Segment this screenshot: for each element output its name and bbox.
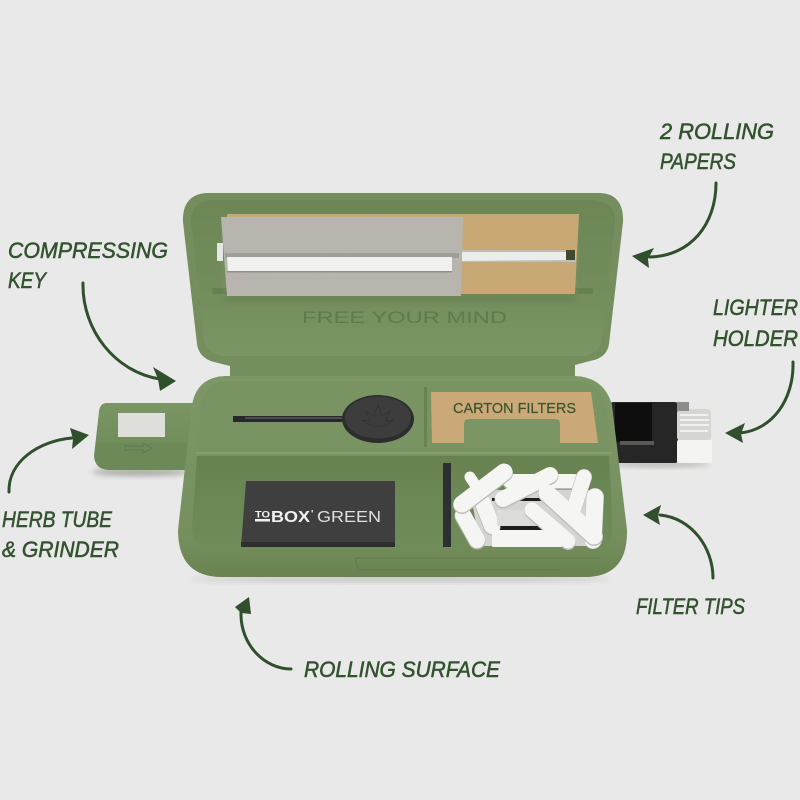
label: lighter holder xyxy=(713,295,798,351)
tube window xyxy=(118,413,165,437)
carton filters pack: CARTON FILTERS xyxy=(453,400,576,417)
tray centre divider xyxy=(424,387,427,447)
compressing key xyxy=(233,395,414,443)
kraft rolling paper booklet xyxy=(227,214,579,294)
label: compressing key xyxy=(8,238,168,293)
label: 2 rolling papers xyxy=(659,119,774,174)
booklet logo xyxy=(255,509,381,526)
label: rolling surface: ROLLING SURFACE xyxy=(304,657,500,682)
arrow: to lighter holder xyxy=(725,362,793,443)
booklet shadow xyxy=(225,294,575,303)
arrow: to filter tips xyxy=(643,505,713,578)
label: herb tube and grinder: & GRINDER xyxy=(2,537,119,562)
panel: herb tube and grinder xyxy=(92,403,195,476)
label: compressing key: KEY xyxy=(8,268,47,293)
label: herb tube and grinder xyxy=(2,507,119,562)
leaf emblem xyxy=(362,405,394,426)
white filter tips xyxy=(462,472,600,547)
panel: case base tray xyxy=(178,376,627,582)
arrow: to compressing key xyxy=(83,283,176,391)
label: compressing key: COMPRESSING xyxy=(8,238,168,263)
ToBox Green booklet xyxy=(241,481,395,547)
label: 2 rolling papers: PAPERS xyxy=(660,149,736,174)
panel: lighter xyxy=(610,402,712,467)
front latch xyxy=(355,558,600,570)
lighter metal head xyxy=(677,402,712,463)
tube arrow mark xyxy=(125,443,152,453)
filter divider xyxy=(443,463,451,547)
lid retaining ledge xyxy=(212,288,593,294)
label: 2 rolling papers: 2 ROLLING xyxy=(659,119,774,144)
arrow: to rolling papers xyxy=(632,183,716,268)
booklet logo: BOX xyxy=(271,509,310,526)
lighter window xyxy=(615,403,654,445)
label: herb tube and grinder: HERB TUBE xyxy=(2,507,112,532)
booklet logo: GREEN xyxy=(317,509,381,526)
front rolling well xyxy=(192,453,613,548)
arrow: to rolling surface xyxy=(235,597,291,669)
grey rolling paper booklet xyxy=(217,217,463,296)
panel: open case lid xyxy=(183,193,623,380)
arrow: to herb tube xyxy=(9,428,89,492)
label: filter tips: FILTER TIPS xyxy=(636,594,745,619)
green retaining tab xyxy=(464,419,560,447)
booklet logo: ' xyxy=(311,509,313,520)
carton filters pack xyxy=(431,392,598,447)
booklet logo: TO xyxy=(255,510,270,520)
embossed slogan: FREE YOUR MIND xyxy=(302,308,507,327)
